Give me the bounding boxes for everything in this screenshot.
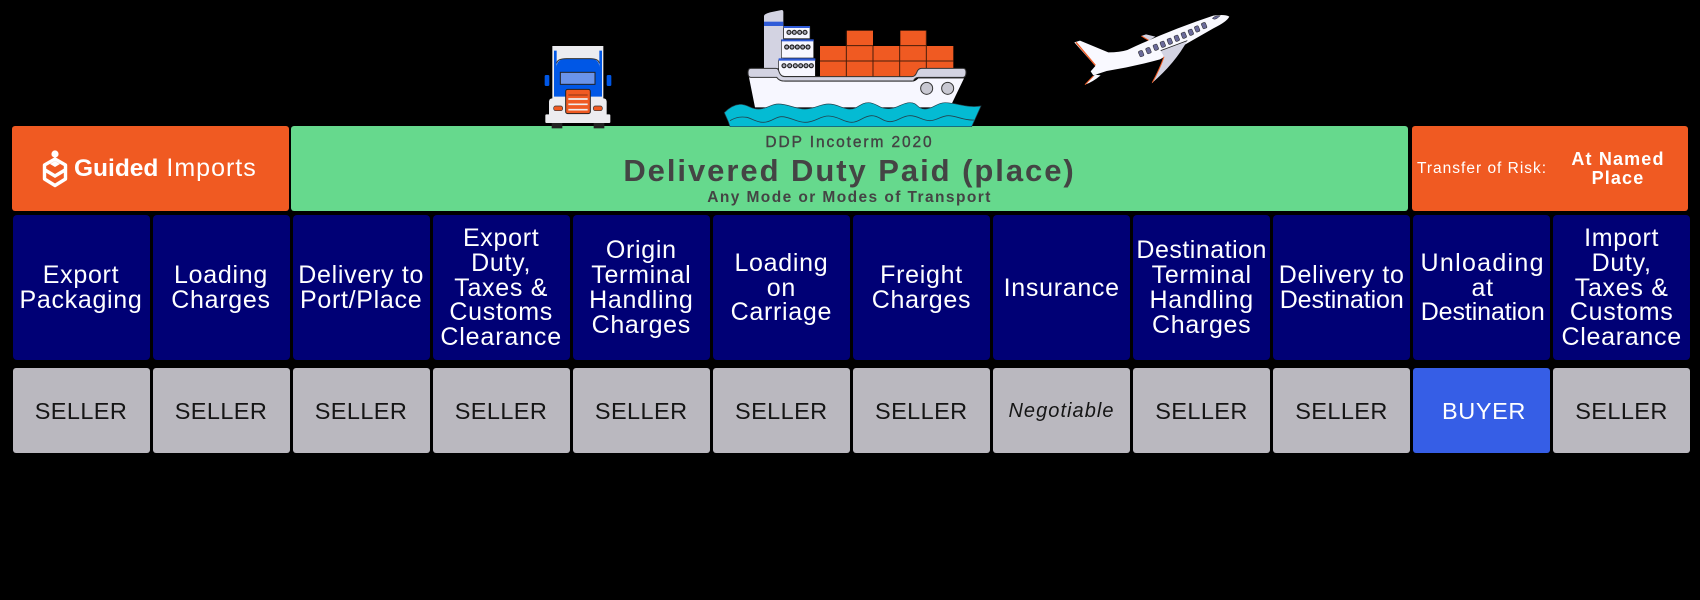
responsibility: import duty: SELLER — [1575, 398, 1668, 424]
cost item: import duty: Clearance — [1562, 323, 1682, 351]
responsibility: delivery to port — [292, 368, 430, 453]
responsibility: origin terminal — [573, 368, 710, 453]
responsibility: freight — [853, 368, 990, 453]
risk transfer point: At Named — [1571, 148, 1665, 168]
cost item: delivery to destination: Delivery to — [1279, 261, 1405, 289]
transport vehicles — [544, 10, 1230, 128]
cost item: unloading: Unloading — [1421, 249, 1545, 277]
responsibility: unloading: BUYER — [1442, 398, 1526, 424]
cost item: insurance: Insurance — [1004, 274, 1120, 302]
cost item: loading charges: Loading — [174, 261, 268, 289]
cost item: export packaging: Export — [43, 261, 119, 289]
cost item: destination terminal: Destination — [1136, 236, 1267, 264]
panel: transfer of risk — [1412, 126, 1688, 210]
cost item: export duty: Duty, — [471, 249, 531, 277]
icon: truck — [545, 46, 611, 128]
cost item: loading on carriage — [713, 215, 850, 360]
responsibility: delivery to port: SELLER — [315, 398, 407, 424]
responsibility: insurance: Negotiable — [1008, 400, 1115, 422]
cost item: delivery to destination: Destination — [1280, 286, 1404, 314]
cost item: unloading: at — [1472, 274, 1494, 302]
cost item: origin terminal — [573, 215, 710, 360]
cost item: insurance — [993, 215, 1130, 360]
cost item: loading charges: Charges — [171, 286, 271, 314]
responsibility: loading charges: SELLER — [175, 398, 267, 424]
cost item: delivery to destination — [1273, 215, 1410, 360]
cost item: destination terminal: Terminal — [1152, 261, 1252, 289]
cost item: loading charges — [152, 215, 290, 360]
responsibility: export packaging — [12, 368, 150, 453]
panel: title banner — [291, 126, 1408, 210]
cost item: freight — [853, 215, 990, 360]
cost item: freight: Freight — [880, 261, 963, 289]
responsibility: destination terminal — [1133, 368, 1270, 453]
responsibility: export duty: SELLER — [455, 398, 547, 424]
cost item: import duty — [1553, 215, 1690, 360]
incoterm year: DDP Incoterm 2020 — [765, 134, 934, 150]
icon: airplane — [1074, 15, 1229, 85]
main title: Delivered Duty Paid (place) — [623, 152, 1076, 188]
cost item: delivery to port: Port/Place — [300, 286, 422, 314]
responsibility: unloading — [1413, 368, 1550, 453]
cost item: export duty: Taxes & — [454, 274, 548, 302]
cost item: export packaging: Packaging — [19, 286, 143, 314]
cost item: import duty: Taxes & — [1575, 274, 1669, 302]
icon: guided imports box logo — [42, 150, 68, 188]
cost item: destination terminal — [1133, 215, 1270, 360]
cost item: unloading: Destination — [1421, 298, 1545, 326]
cost item: destination terminal: Charges — [1152, 311, 1251, 339]
responsibility: export packaging: SELLER — [35, 398, 127, 424]
cost item: origin terminal: Terminal — [591, 261, 691, 289]
risk transfer point: Place — [1592, 168, 1644, 188]
cost item: import duty: Import — [1584, 224, 1659, 252]
logo wordmark: Guided Imports — [74, 154, 257, 182]
icon: ship — [724, 10, 981, 127]
responsibility: export duty — [432, 368, 570, 453]
responsibility: loading charges — [152, 368, 290, 453]
transport mode subtitle: Any Mode or Modes of Transport — [707, 188, 992, 206]
cost item: loading on carriage: Carriage — [731, 298, 832, 326]
cost item: import duty: Customs — [1570, 298, 1673, 326]
cost item: origin terminal: Handling — [589, 286, 693, 314]
cost item: freight: Charges — [872, 286, 971, 314]
cost item: origin terminal: Charges — [592, 311, 691, 339]
responsibility: insurance — [993, 368, 1130, 453]
cost item: loading on carriage: on — [767, 274, 796, 302]
panel: logo banner — [12, 126, 289, 210]
cost item: origin terminal: Origin — [606, 236, 677, 264]
cost item: export duty — [433, 215, 570, 360]
cost item: export duty: Export — [463, 224, 539, 252]
responsibility: destination terminal: SELLER — [1155, 398, 1248, 424]
cost item: delivery to port: Delivery to — [298, 261, 424, 289]
responsibility: loading on carriage: SELLER — [735, 398, 828, 424]
transfer of risk label: Transfer of Risk: — [1417, 160, 1547, 176]
cost item: destination terminal: Handling — [1150, 286, 1254, 314]
risk transfer point — [1571, 148, 1665, 188]
cost item: export duty: Customs — [449, 298, 553, 326]
responsibility: freight: SELLER — [875, 398, 968, 424]
responsibility: loading on carriage — [713, 368, 850, 453]
responsibility: delivery to destination: SELLER — [1295, 398, 1388, 424]
cost item: import duty: Duty, — [1592, 249, 1652, 277]
responsibility: delivery to destination — [1273, 368, 1410, 453]
cost item: export duty: Clearance — [440, 323, 562, 351]
cost item: delivery to port — [293, 215, 430, 360]
responsibility: origin terminal: SELLER — [595, 398, 687, 424]
cost item: export packaging — [12, 215, 150, 360]
cost item: unloading — [1413, 215, 1550, 360]
responsibility: import duty — [1553, 368, 1690, 453]
cost item: loading on carriage: Loading — [734, 249, 828, 277]
